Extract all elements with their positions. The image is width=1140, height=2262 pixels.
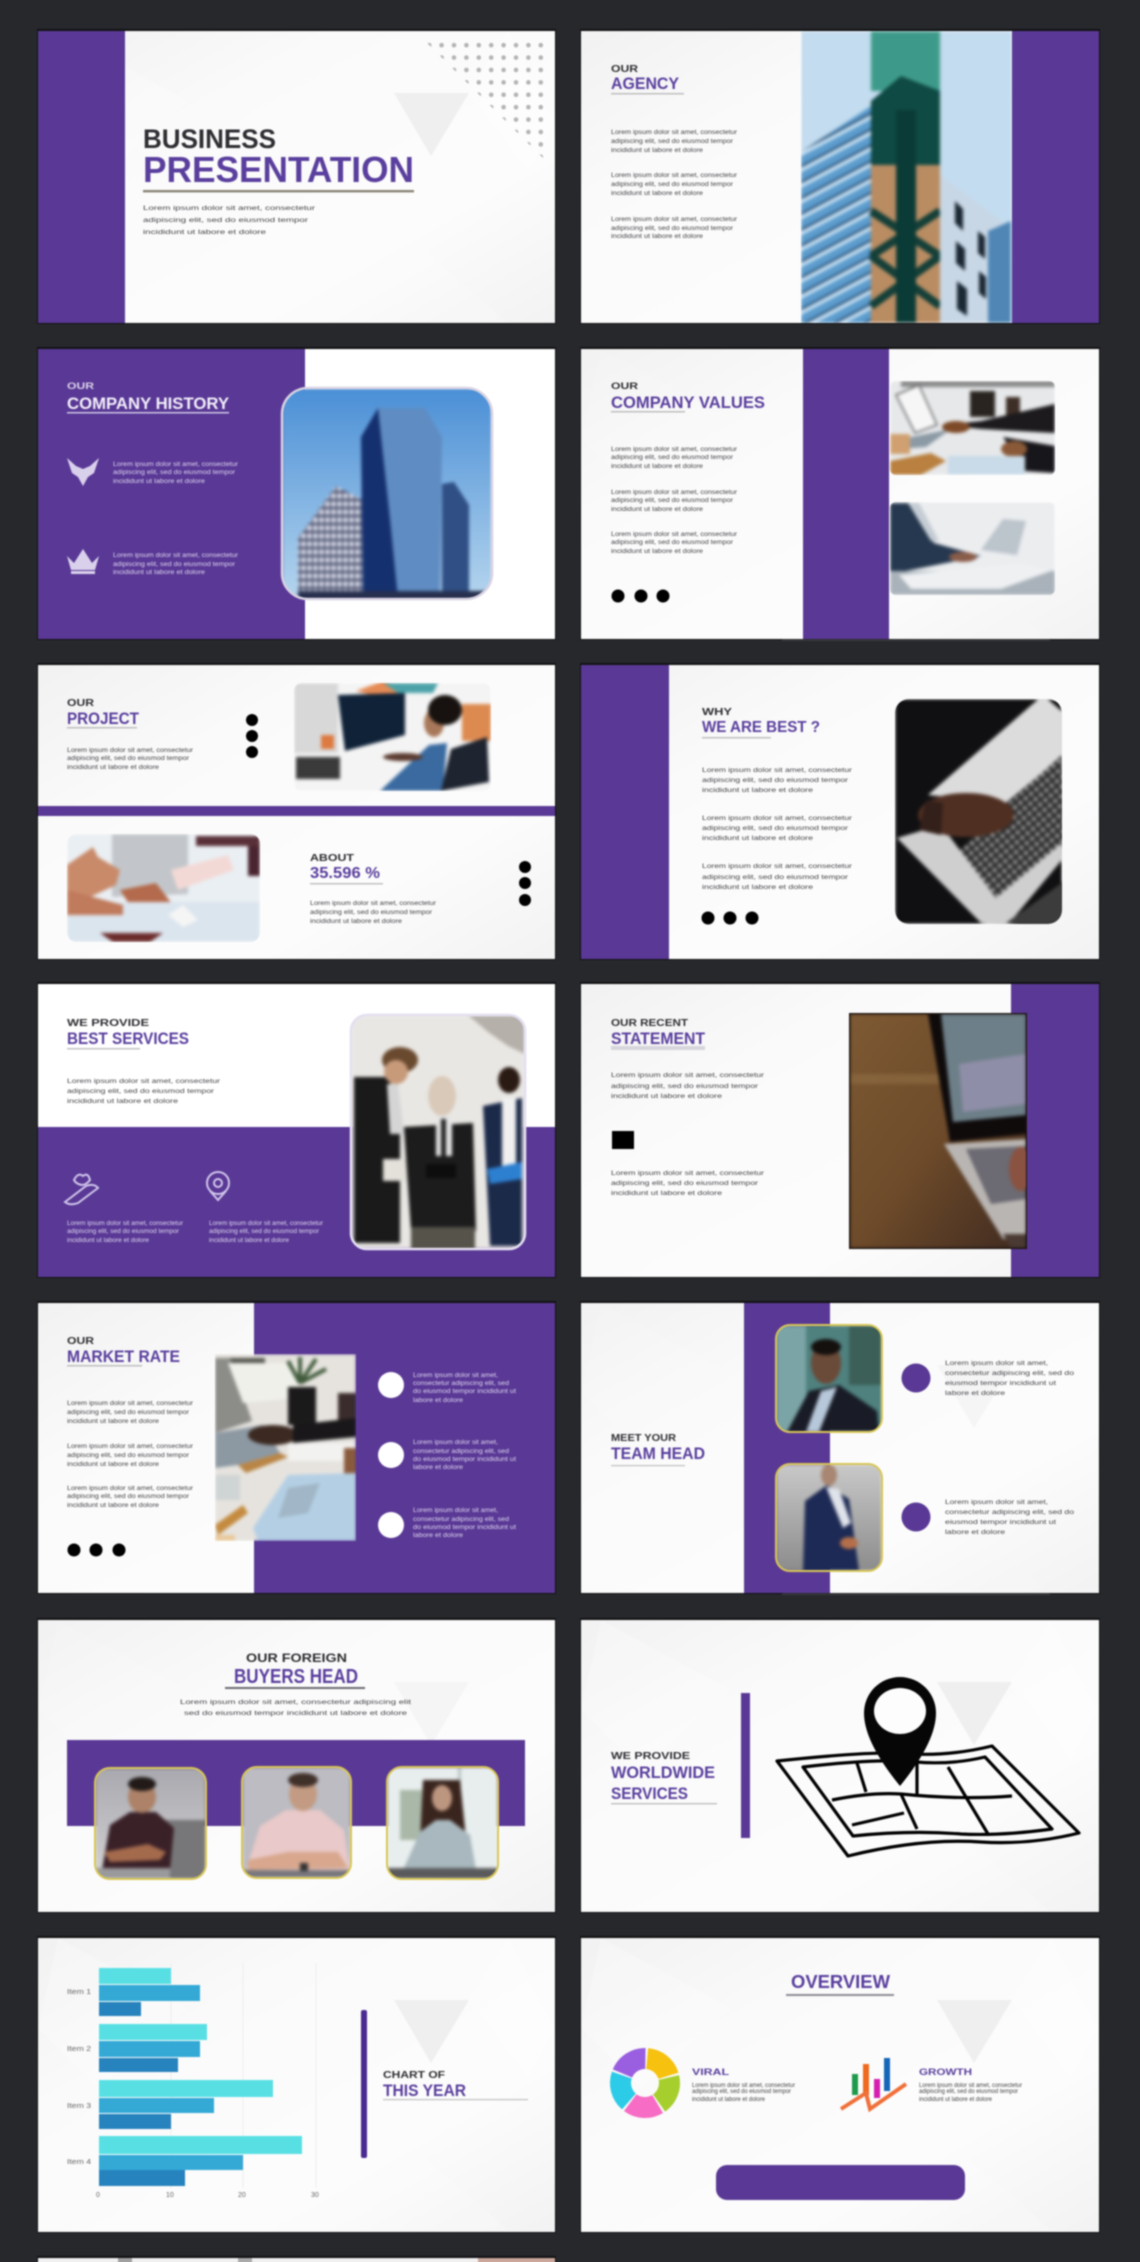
bar chart: 30 [311, 2192, 319, 2199]
cover body text: adipiscing elit, sed do eiusmod tempor [143, 217, 309, 224]
agency body text [611, 129, 738, 240]
market text two: consectetur adipiscing elit, sed [413, 1448, 509, 1455]
about body text: incididunt ut labore et dolore [310, 918, 402, 925]
service text one [67, 1220, 184, 1244]
market body text: adipiscing elit, sed do eiusmod tempor [67, 1409, 190, 1416]
project body text: adipiscing elit, sed do eiusmod tempor [67, 755, 190, 762]
why body text: Lorem ipsum dolor sit amet, consectetur [702, 767, 853, 774]
statement text one: incididunt ut labore et dolore [611, 1093, 723, 1100]
market body text: incididunt ut labore et dolore [67, 1502, 159, 1509]
agency body text: adipiscing elit, sed do eiusmod tempor [611, 138, 734, 145]
values body text: Lorem ipsum dolor sit amet, consectetur [611, 446, 738, 453]
bar chart: 20 [238, 2192, 246, 2199]
market text one: consectetur adipiscing elit, sed [413, 1380, 509, 1387]
slide 6: why we are best [580, 663, 1100, 960]
photo: buyer three [387, 1767, 498, 1879]
market body text: adipiscing elit, sed do eiusmod tempor [67, 1452, 190, 1459]
heading: company history: COMPANY HISTORY [67, 394, 230, 413]
market text one: labore et dolore [413, 1397, 463, 1404]
statement text one: adipiscing elit, sed do eiusmod tempor [611, 1083, 759, 1090]
values body text: incididunt ut labore et dolore [611, 463, 703, 470]
heading: recent statement: OUR RECENT [611, 1017, 689, 1029]
heading: our agency: AGENCY [611, 74, 680, 93]
why body text: incididunt ut labore et dolore [702, 884, 814, 891]
services body text: incididunt ut labore et dolore [67, 1098, 179, 1105]
bar chart: Item 2 [67, 2046, 91, 2053]
photo: man at computer [294, 681, 491, 791]
slide 14: overview [580, 1936, 1100, 2233]
heading: worldwide services: WE PROVIDE [611, 1751, 690, 1762]
slide 2: our agency [580, 29, 1100, 324]
team text one: eiusmod tempor incididunt ut [945, 1380, 1056, 1387]
icon: bull head [67, 458, 99, 486]
slide 7: best services [37, 982, 556, 1278]
service text two [209, 1220, 324, 1244]
values body text: incididunt ut labore et dolore [611, 506, 703, 513]
heading: company values: OUR [611, 381, 638, 392]
values body text: adipiscing elit, sed do eiusmod tempor [611, 539, 734, 546]
team text two: Lorem ipsum dolor sit amet, [945, 1499, 1048, 1506]
heading: about 35.596 percent [310, 853, 383, 884]
service text two: Lorem ipsum dolor sit amet, consectetur [209, 1220, 324, 1227]
history text one: incididunt ut labore et dolore [113, 478, 205, 485]
slide 5: our project [37, 663, 556, 960]
buyers body text: sed do eiusmod tempor incididunt ut labore et dolore [184, 1710, 408, 1717]
services body text: Lorem ipsum dolor sit amet, consectetur [67, 1078, 221, 1085]
why body text: incididunt ut labore et dolore [702, 787, 814, 794]
heading: recent statement: STATEMENT [611, 1029, 706, 1048]
values body text: adipiscing elit, sed do eiusmod tempor [611, 454, 734, 461]
heading: market rate: MARKET RATE [67, 1347, 180, 1366]
market text two: Lorem ipsum dolor sit amet, [413, 1439, 498, 1446]
marker: white circle three [378, 1512, 404, 1538]
title: business: BUSINESS [143, 124, 276, 154]
icon: colour donut [610, 2048, 680, 2118]
purple divider bar [361, 2010, 367, 2158]
why body text: adipiscing elit, sed do eiusmod tempor [702, 874, 849, 881]
slide 8: recent statement [580, 982, 1100, 1278]
heading: recent statement [611, 1017, 706, 1050]
why body text: incididunt ut labore et dolore [702, 835, 814, 842]
service text one: adipiscing elit, sed do eiusmod tempor [67, 1228, 180, 1235]
why body text: adipiscing elit, sed do eiusmod tempor [702, 825, 849, 832]
buyers body text: Lorem ipsum dolor sit amet, consectetur adipiscing elit [180, 1699, 411, 1706]
team text one: Lorem ipsum dolor sit amet, [945, 1360, 1048, 1367]
icon: location pin [864, 1677, 936, 1786]
values body text: Lorem ipsum dolor sit amet, consectetur [611, 531, 738, 538]
about body text: Lorem ipsum dolor sit amet, consectetur [310, 900, 437, 907]
heading: company values [611, 381, 765, 412]
heading: our project: OUR [67, 698, 95, 709]
icon: heart in hand [65, 1175, 98, 1204]
growth text: GROWTH [919, 2067, 972, 2077]
heading: best services [67, 1017, 189, 1050]
market text two: labore et dolore [413, 1464, 463, 1471]
heading: our project: PROJECT [67, 709, 140, 728]
about body text [310, 900, 437, 925]
statement text one: Lorem ipsum dolor sit amet, consectetur [611, 1072, 765, 1079]
agency body text: incididunt ut labore et dolore [611, 190, 703, 197]
statement text two: Lorem ipsum dolor sit amet, consectetur [611, 1170, 765, 1177]
viral text [692, 2067, 796, 2103]
heading: our agency [611, 64, 684, 94]
marker: purple circle one [902, 1364, 930, 1392]
slide 15: cut-off next slide [37, 2256, 556, 2262]
agency body text: adipiscing elit, sed do eiusmod tempor [611, 225, 734, 232]
why body text [702, 767, 853, 891]
bar chart: 0 [96, 2192, 100, 2199]
photo: meeting at desk [890, 381, 1055, 475]
heading: team head: TEAM HEAD [611, 1444, 705, 1463]
heading: our agency: OUR [611, 64, 639, 75]
heading: why we are best: WHY [702, 707, 732, 718]
market text two: do eiusmod tempor incididunt ut [413, 1456, 516, 1463]
agency body text: incididunt ut labore et dolore [611, 233, 703, 240]
market body text: incididunt ut labore et dolore [67, 1461, 159, 1468]
purple band [67, 1740, 525, 1826]
buyers body text [180, 1699, 411, 1717]
history text one: adipiscing elit, sed do eiusmod tempor [113, 469, 236, 476]
history text two [113, 552, 239, 576]
heading: foreign buyers head [225, 1651, 365, 1689]
photo: desk with plant and laptop [215, 1354, 356, 1541]
three black dots [702, 912, 758, 924]
slide 11: foreign buyers head [37, 1618, 556, 1913]
history text two: adipiscing elit, sed do eiusmod tempor [113, 561, 236, 568]
title: presentation: PRESENTATION [143, 149, 414, 190]
why body text: Lorem ipsum dolor sit amet, consectetur [702, 815, 853, 822]
market text three: consectetur adipiscing elit, sed [413, 1516, 509, 1523]
growth text [919, 2067, 1023, 2103]
bar chart: Item 3 [67, 2103, 91, 2110]
market text one: Lorem ipsum dolor sit amet, [413, 1372, 498, 1379]
heading: best services: BEST SERVICES [67, 1029, 189, 1048]
services body text [67, 1078, 221, 1105]
team text one: consectetur adipiscing elit, sed do [945, 1370, 1075, 1377]
history text two: incididunt ut labore et dolore [113, 569, 205, 576]
cover body text: incididunt ut labore et dolore [143, 229, 267, 236]
photo: team head two [776, 1464, 882, 1571]
statement text two: adipiscing elit, sed do eiusmod tempor [611, 1180, 759, 1187]
heading: company values: COMPANY VALUES [611, 393, 765, 412]
market body text: Lorem ipsum dolor sit amet, consectetur [67, 1443, 194, 1450]
why body text: adipiscing elit, sed do eiusmod tempor [702, 777, 849, 784]
bar chart: Item 1 [67, 1989, 91, 1996]
growth text: incididunt ut labore et dolore [919, 2096, 992, 2103]
purple pill button [716, 2165, 965, 2200]
marker: white circle one [378, 1372, 404, 1398]
heading: team head [611, 1433, 705, 1466]
vertical dots right [519, 861, 531, 906]
photo: glass building [801, 31, 1012, 323]
icon: growth chart [841, 2058, 906, 2109]
growth text: adipiscing elit, sed do eiusmod tempor [919, 2088, 1019, 2095]
team text two [945, 1499, 1075, 1536]
heading: market rate: OUR [67, 1336, 95, 1347]
service text one: Lorem ipsum dolor sit amet, consectetur [67, 1220, 184, 1227]
agency body text: Lorem ipsum dolor sit amet, consectetur [611, 129, 738, 136]
team text two: labore et dolore [945, 1529, 1006, 1536]
purple divider bar [741, 1693, 750, 1838]
slide 1: business presentation cover [37, 29, 556, 324]
market text two [413, 1439, 516, 1471]
heading: chart of this year: THIS YEAR [383, 2081, 466, 2100]
cover body text [143, 205, 316, 236]
photo: hand on laptop keyboard [895, 695, 1066, 927]
heading: best services: WE PROVIDE [67, 1017, 149, 1029]
market text three: labore et dolore [413, 1532, 463, 1539]
photo: three businessmen [351, 1015, 525, 1252]
icon: location badge [207, 1172, 229, 1200]
service text two: incididunt ut labore et dolore [209, 1237, 289, 1244]
slide 13: chart of this year [37, 1936, 556, 2233]
team text two: consectetur adipiscing elit, sed do [945, 1509, 1075, 1516]
market body text: Lorem ipsum dolor sit amet, consectetur [67, 1400, 194, 1407]
heading: company history: OUR [67, 381, 94, 392]
heading: why we are best: WE ARE BEST ? [702, 719, 820, 736]
market body text: Lorem ipsum dolor sit amet, consectetur [67, 1485, 194, 1492]
statement text one [611, 1072, 765, 1100]
team text one [945, 1360, 1075, 1397]
heading: worldwide services: WORLDWIDE [611, 1763, 715, 1782]
cover body text: Lorem ipsum dolor sit amet, consectetur [143, 205, 316, 212]
viral text: adipiscing elit, sed do eiusmod tempor [692, 2088, 792, 2095]
market body text: adipiscing elit, sed do eiusmod tempor [67, 1493, 190, 1500]
market text one: do eiusmod tempor incididunt ut [413, 1388, 516, 1395]
viral text: VIRAL [692, 2067, 730, 2077]
three black dots [68, 1544, 126, 1556]
heading: chart of this year [383, 2070, 528, 2100]
statement text two: incididunt ut labore et dolore [611, 1190, 723, 1197]
project body text: Lorem ipsum dolor sit amet, consectetur [67, 747, 194, 754]
agency body text: incididunt ut labore et dolore [611, 147, 703, 154]
heading: market rate [67, 1336, 180, 1366]
heading: overview: OVERVIEW [791, 1972, 890, 1992]
viral text: incididunt ut labore et dolore [692, 2096, 765, 2103]
heading: foreign buyers head: BUYERS HEAD [234, 1666, 358, 1688]
history text one [113, 461, 239, 485]
values body text: incididunt ut labore et dolore [611, 548, 703, 555]
about body text: adipiscing elit, sed do eiusmod tempor [310, 909, 433, 916]
why body text: Lorem ipsum dolor sit amet, consectetur [702, 863, 853, 870]
photo: skyscrapers [282, 388, 492, 601]
service text one: incididunt ut labore et dolore [67, 1237, 149, 1244]
three black dots [612, 590, 670, 602]
market body text [67, 1400, 194, 1509]
icon: paper map [777, 1746, 1079, 1856]
history text two: Lorem ipsum dolor sit amet, consectetur [113, 552, 239, 559]
heading: about 35.596 percent: ABOUT [310, 853, 354, 864]
photo: team head one [776, 1325, 882, 1432]
photo: hands with tablet [67, 834, 260, 942]
values body text: Lorem ipsum dolor sit amet, consectetur [611, 489, 738, 496]
viral text: Lorem ipsum dolor sit amet, consectetur [692, 2082, 796, 2089]
slide 4: company values [580, 347, 1100, 641]
photo: man typing on laptop [890, 502, 1055, 595]
market text three [413, 1507, 516, 1539]
statement text two [611, 1170, 765, 1197]
slide 12: worldwide services [580, 1618, 1100, 1913]
photo: laptop with code on wood desk [849, 1013, 1033, 1249]
vertical dots [246, 714, 258, 758]
agency body text: Lorem ipsum dolor sit amet, consectetur [611, 172, 738, 179]
heading: worldwide services [611, 1751, 717, 1804]
heading: company history [67, 381, 230, 414]
heading: our project [67, 698, 140, 728]
service text two: adipiscing elit, sed do eiusmod tempor [209, 1228, 320, 1235]
heading: why we are best [702, 707, 820, 738]
photo: buyer one [95, 1768, 206, 1879]
heading: foreign buyers head: OUR FOREIGN [246, 1651, 347, 1665]
values body text: adipiscing elit, sed do eiusmod tempor [611, 497, 734, 504]
bar chart: 10 [166, 2192, 174, 2199]
bar chart [67, 1963, 319, 2199]
history text one: Lorem ipsum dolor sit amet, consectetur [113, 461, 239, 468]
team text two: eiusmod tempor incididunt ut [945, 1519, 1056, 1526]
team text one: labore et dolore [945, 1390, 1006, 1397]
agency body text: adipiscing elit, sed do eiusmod tempor [611, 181, 734, 188]
heading: worldwide services: SERVICES [611, 1784, 688, 1803]
values body text [611, 446, 738, 555]
bar chart: Item 4 [67, 2159, 91, 2166]
heading: chart of this year: CHART OF [383, 2070, 445, 2081]
market body text: incididunt ut labore et dolore [67, 1418, 159, 1425]
marker: white circle two [378, 1442, 404, 1468]
slide 9: market rate [37, 1301, 556, 1594]
heading: about 35.596 percent: 35.596 % [310, 865, 380, 882]
icon: crown [67, 549, 99, 574]
slide 3: company history [37, 347, 556, 640]
marker: purple circle two [902, 1502, 930, 1532]
market text one [413, 1372, 516, 1404]
black rectangle [612, 1131, 634, 1149]
services body text: adipiscing elit, sed do eiusmod tempor [67, 1088, 215, 1095]
project body text: incididunt ut labore et dolore [67, 764, 159, 771]
heading: team head: MEET YOUR [611, 1433, 677, 1444]
growth text: Lorem ipsum dolor sit amet, consectetur [919, 2082, 1023, 2089]
project body text [67, 747, 194, 771]
agency body text: Lorem ipsum dolor sit amet, consectetur [611, 216, 738, 223]
photo: buyer two [242, 1767, 351, 1878]
market text three: Lorem ipsum dolor sit amet, [413, 1507, 498, 1514]
slide 10: meet your team head [580, 1301, 1100, 1595]
market text three: do eiusmod tempor incididunt ut [413, 1524, 516, 1531]
